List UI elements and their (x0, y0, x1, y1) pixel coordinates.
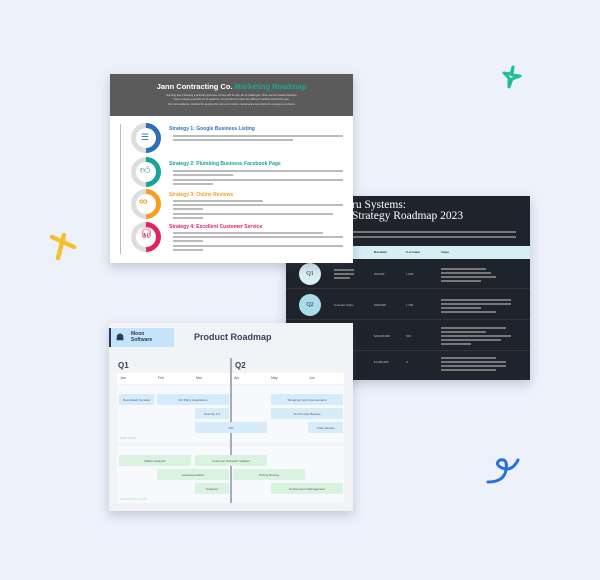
panel: Moon Software product roadmap (109, 323, 353, 511)
marketing bars: Market Analysis (144, 458, 166, 462)
panel: Moon Software product roadmap: Lead Generation (182, 472, 204, 476)
table header: Steps (441, 250, 449, 254)
header band (110, 74, 353, 116)
quarter labels: Q1 (118, 361, 129, 370)
title: ru Systems: (352, 199, 406, 211)
month header: May (271, 376, 278, 380)
panel: Moon Software product roadmap: API (229, 426, 233, 430)
strategy 2 (131, 157, 343, 187)
panel: Moon Software product roadmap: Shopping Cart Improvements (287, 398, 327, 402)
title (352, 199, 463, 222)
Q2 divider (230, 358, 232, 503)
icon: blue squiggle (486, 458, 520, 484)
panel: Moon Software product roadmap: Security 2.0 (204, 412, 220, 416)
marketing bars (119, 455, 191, 466)
table header: Revenue (374, 250, 387, 254)
row Q1: Q1 (306, 271, 314, 277)
strategy 3: Strategy 3: Online Reviews (169, 192, 233, 198)
intro text: have to target a specific set of audience, but we have to reach two different markets around the year. (174, 98, 289, 101)
logo: Moon (131, 331, 144, 337)
row Q3: 500 (406, 334, 411, 338)
month header: Feb (158, 376, 164, 380)
web bars (119, 394, 154, 405)
row Q4: $1,000,000 (374, 360, 388, 364)
marketing team lane: MARKETING TEAM (120, 497, 147, 501)
table header: # of Sales (406, 250, 420, 254)
panel: Moon Software product roadmap: Customer Outreach Initiative (212, 458, 250, 462)
panel: Moon Software product roadmap: On Provider Backup (294, 412, 320, 416)
row Q1: $50,000 (374, 272, 384, 276)
table header (286, 246, 530, 259)
strategy 3: ∞ (139, 194, 148, 208)
icon: yellow cross (50, 232, 76, 260)
panel: Go-to-market strategy roadmap (dark) (286, 196, 530, 380)
panel: Moon Software product roadmap: Performance Management (289, 486, 325, 490)
panel: Moon Software product roadmap: Pricing Review (259, 472, 279, 476)
row Q3 (286, 321, 530, 351)
row Q4: 0 (406, 360, 408, 364)
row Q4 (374, 357, 506, 371)
web team lane (117, 385, 344, 443)
intro text: Our main audience includes the people who call us for routine maintenance and others for emergency services. (168, 103, 295, 106)
strategy 3 (131, 189, 343, 219)
strategy 4: 🎧︎ (140, 228, 153, 239)
marketing team lane (117, 446, 344, 503)
strategy 1: Strategy 1: Google Business Listing (169, 126, 255, 132)
panel: Jann Contracting marketing roadmap (110, 74, 353, 263)
web bars: New Attach Console (123, 398, 150, 402)
row Q1 (286, 259, 530, 289)
title: Strategy Roadmap 2023 (352, 210, 463, 222)
icon: green star sparkle (502, 66, 522, 88)
strategy 2: 👍︎ (140, 165, 150, 176)
month header: Mar (196, 376, 202, 380)
strategy 4: Strategy 4: Excellent Customer Service (169, 224, 262, 230)
logo (109, 328, 174, 347)
strategy 4 (131, 222, 343, 252)
month header: Jan (120, 376, 126, 380)
panel: Moon Software product roadmap: Q2 (235, 361, 246, 370)
row Q2: Generate SQLs (334, 303, 354, 307)
timeline line (120, 124, 121, 254)
month header (117, 373, 344, 384)
strategy 1 (131, 123, 343, 153)
intro text (166, 94, 297, 106)
logo: ☗ (116, 332, 124, 342)
intro text: Running and marketing a plumbing business comes with its own set of challenges. Other service based industries (166, 94, 297, 97)
panel: Moon Software product roadmap: Code Review (317, 426, 334, 430)
panel: Moon Software product roadmap: Analytics (206, 486, 218, 490)
logo: Software (131, 337, 152, 343)
web team lane: WEB TEAM (120, 436, 136, 440)
title: Product Roadmap (194, 332, 272, 342)
row Q2: Q2 (306, 302, 314, 308)
row Q1: 1,000 (406, 272, 413, 276)
month header: Jun (309, 376, 315, 380)
row Q2: 1,500 (406, 303, 413, 307)
row Q2 (286, 290, 530, 320)
row Q2: $200,000 (374, 303, 386, 307)
row Q3: $20,000,000 (374, 334, 390, 338)
intro text (294, 231, 516, 232)
month header: Apr (234, 376, 239, 380)
panel: Moon Software product roadmap: 3rd Party Integrations (179, 398, 207, 402)
strategy 2: Strategy 2: Plumbing Business Facebook Page (169, 161, 281, 167)
strategy 1: ☰ (141, 132, 149, 142)
title: Jann Contracting Co. Marketing Roadmap (157, 82, 306, 91)
